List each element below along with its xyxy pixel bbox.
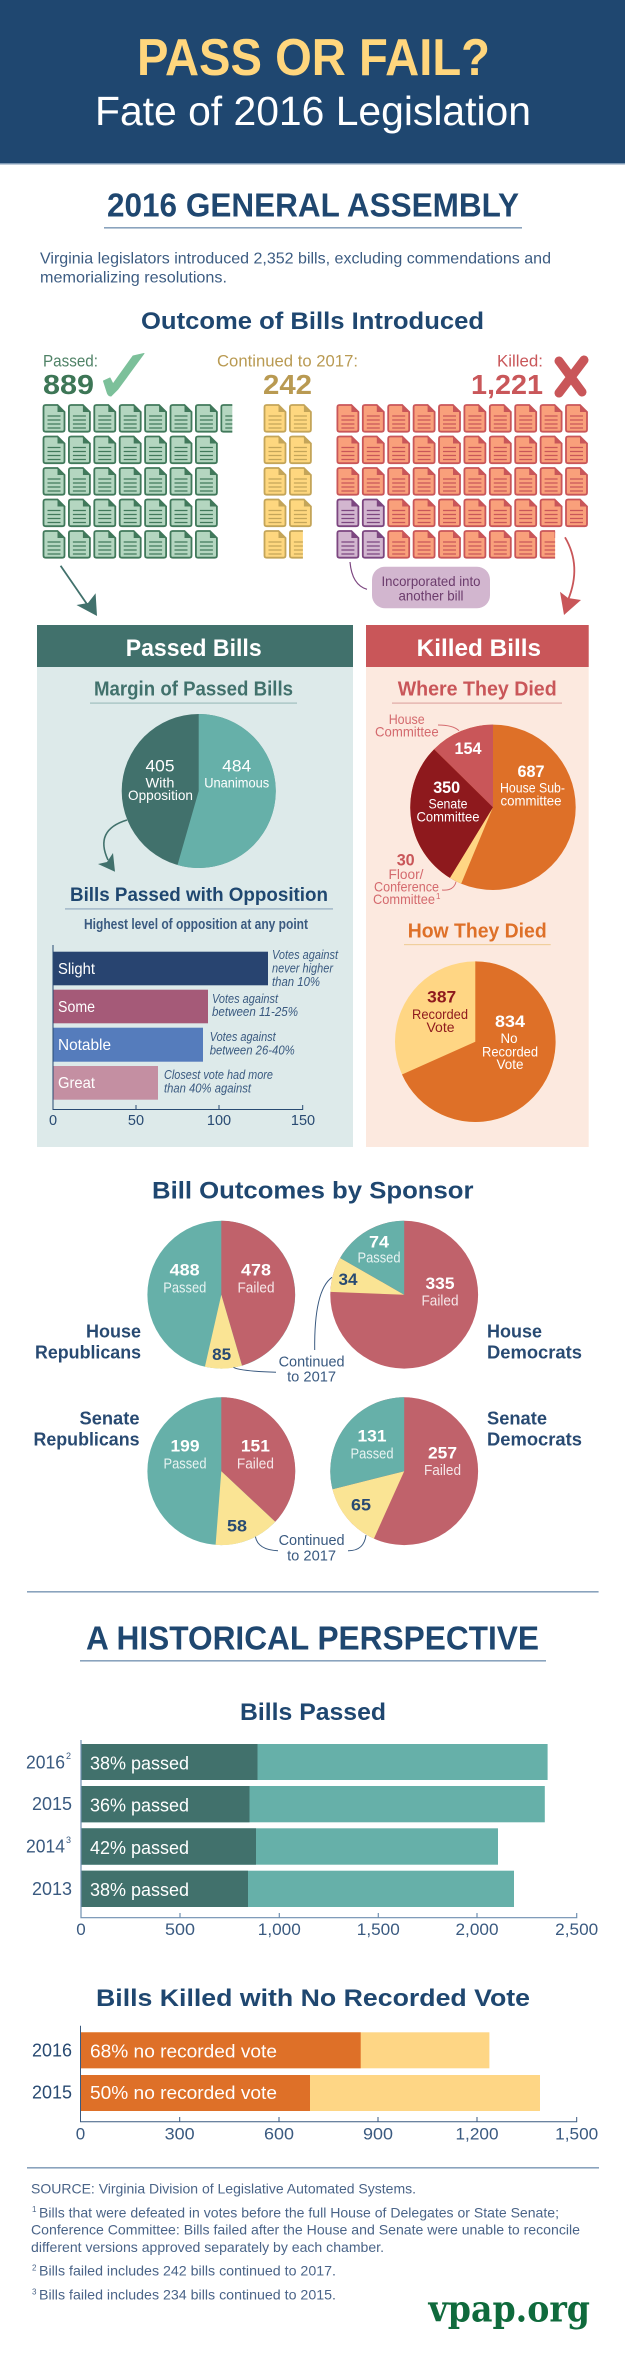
pie chart: margin of passed bills	[122, 714, 276, 868]
bar: slight: than 10%	[272, 974, 320, 989]
source and footnotes: Bills failed includes 242 bills continued to 2017.	[39, 2263, 336, 2279]
axis: 2,000	[456, 1920, 498, 1939]
label: house committee: Committee	[375, 724, 439, 740]
axis	[76, 2026, 598, 2143]
axis: 2,500	[555, 1920, 598, 1939]
axis: 50	[128, 1113, 144, 1129]
icon grid: continued bills	[264, 405, 311, 558]
axis: 900	[363, 2124, 393, 2143]
source and footnotes: Bills failed includes 234 bills continued to 2015.	[39, 2287, 336, 2303]
pie chart: house republicans: 488	[170, 1261, 200, 1280]
continued count: Continued to 2017:	[217, 352, 358, 371]
source and footnotes: 2	[32, 2264, 37, 2272]
arrow: to bills passed with opposition	[98, 820, 127, 872]
heading: where they died: Where They Died	[398, 679, 557, 701]
subheading: Highest level of opposition at any point	[84, 917, 308, 933]
pie chart: margin of passed bills: With	[146, 775, 174, 791]
pie chart: senate republicans: 151	[241, 1437, 270, 1456]
bar: some: Some	[58, 999, 95, 1016]
bar: notable: between 26-40%	[210, 1042, 295, 1058]
subtitle: Fate of 2016 Legislation	[95, 88, 531, 134]
bar: great: Great	[58, 1075, 96, 1092]
pie chart: senate democrats	[330, 1397, 478, 1545]
source and footnotes: Bills that were defeated in votes before the full House of Delegates or State Senate;	[39, 2204, 559, 2220]
pie chart: house democrats: 74	[369, 1232, 390, 1251]
bar: 2013: 38% passed	[90, 1880, 189, 1900]
pie chart: where they died	[410, 725, 576, 890]
heading: bills killed with no recorded vote: Bills Killed with No Recorded Vote	[96, 1985, 530, 2012]
label: house democrats: Democrats	[487, 1342, 582, 1362]
bar: 2015: 36% passed	[90, 1796, 189, 1816]
axis: 1,000	[258, 1920, 301, 1939]
label: floor conference committee: Committee	[373, 891, 435, 907]
bar: 2013: 2013	[32, 1879, 72, 1899]
pie chart: senate democrats: 257	[428, 1443, 457, 1462]
bar chart: opposition level	[49, 945, 339, 1129]
axis: 150	[291, 1113, 315, 1129]
axis: 0	[76, 1920, 86, 1939]
pie chart: margin of passed bills: 405	[146, 757, 174, 776]
heading: 2016 general assembly: 2016 GENERAL ASSEMBLY	[107, 187, 519, 224]
bar: slight: never higher	[272, 960, 334, 976]
axis	[76, 1740, 598, 1939]
label: house democrats: House	[487, 1321, 542, 1341]
bar: notable: Notable	[58, 1037, 111, 1054]
pie chart: where they died: Senate	[428, 796, 468, 812]
panel heading: killed bills: Killed Bills	[417, 635, 541, 662]
pie chart: senate republicans	[147, 1397, 295, 1545]
killed count: 1,221	[471, 369, 543, 400]
source and footnotes: SOURCE: Virginia Division of Legislative Automated Systems.	[31, 2180, 416, 2196]
label: floor conference committee	[373, 851, 456, 907]
pie chart: where they died: House Sub-	[500, 780, 565, 796]
pie chart: how they died: 834	[495, 1012, 526, 1031]
label: house republicans: Republicans	[35, 1342, 141, 1362]
continued count	[217, 352, 358, 400]
label: senate republicans: Senate	[80, 1408, 140, 1428]
pie chart: margin of passed bills: Opposition	[128, 787, 193, 803]
arrow: to passed bills	[61, 566, 97, 616]
bar: 2014: 42% passed	[90, 1838, 189, 1858]
label: house committee: House	[389, 711, 425, 727]
axis: 300	[165, 2124, 195, 2143]
pie chart: where they died: Committee	[416, 809, 480, 825]
label: floor conference committee: Conference	[374, 879, 439, 895]
pie chart: senate republicans: Passed	[164, 1455, 206, 1472]
callout: continued to 2017, senate: Continued	[279, 1532, 345, 1549]
label: house committee	[375, 711, 459, 740]
label: floor conference committee: 1	[436, 892, 441, 901]
pie chart: house democrats: 34	[338, 1270, 358, 1289]
pie chart: where they died: 687	[518, 762, 544, 781]
bar: notable	[53, 1028, 295, 1062]
pie chart: how they died: Vote	[496, 1056, 524, 1072]
axis: 1,500	[357, 1920, 400, 1939]
pie chart: where they died: committee	[500, 793, 562, 809]
bar: 2014: 2014	[26, 1836, 65, 1856]
pie chart: house republicans: 85	[212, 1345, 231, 1364]
axis: 1,200	[456, 2124, 498, 2143]
pie chart: house democrats: Failed	[422, 1293, 458, 1310]
pie chart: house republicans: 478	[241, 1261, 271, 1280]
logo: vpap.org: vpap.org	[428, 2289, 590, 2331]
passed count	[43, 352, 144, 400]
pie chart: how they died: Recorded	[412, 1006, 468, 1022]
bar: 2015: 50% no recorded vote	[90, 2083, 277, 2103]
bar: slight: Votes against	[272, 947, 339, 962]
icon grid: killed bills	[337, 405, 587, 558]
bar: 2016: 38% passed	[90, 1753, 189, 1773]
pie chart: house democrats: Passed	[358, 1249, 400, 1266]
heading: outcome of bills introduced: Outcome of Bills Introduced	[141, 308, 484, 335]
arrow: to killed bills	[560, 537, 581, 615]
callout: continued to 2017, senate	[255, 1532, 366, 1565]
icon grid: passed bills	[44, 405, 242, 558]
pie chart: how they died: Vote	[426, 1019, 455, 1035]
bar chart: bills killed with no recorded vote	[32, 2026, 598, 2143]
pie chart: where they died: 350	[433, 778, 460, 797]
heading: margin of passed bills: Margin of Passed Bills	[94, 679, 293, 701]
pie chart: senate democrats: Failed	[424, 1462, 461, 1479]
pie chart: senate republicans: Failed	[237, 1455, 274, 1472]
heading: how they died: How They Died	[408, 920, 547, 942]
intro text	[40, 250, 551, 287]
axis: 1,500	[555, 2124, 598, 2143]
bar: great	[53, 1066, 273, 1100]
pie chart: how they died: Recorded	[482, 1044, 538, 1060]
bar: some	[53, 990, 298, 1023]
label: floor conference committee: 30	[397, 851, 415, 870]
callout: incorporated into another bill	[350, 562, 490, 608]
passed count: Passed:	[43, 352, 98, 371]
bar: 2016	[26, 1744, 548, 1780]
bar: 2016: 2	[66, 1751, 71, 1761]
icon: x mark	[559, 360, 584, 393]
bar: 2016: 2016	[26, 1752, 65, 1772]
callout: continued to 2017, house: to 2017	[287, 1369, 336, 1386]
axis: 0	[49, 1113, 57, 1129]
bar: great: Closest vote had more	[164, 1067, 273, 1082]
callout: continued to 2017, house	[234, 1277, 345, 1386]
bar: some: Votes against	[212, 991, 279, 1006]
pie chart: margin of passed bills: 484	[222, 757, 251, 776]
bar: 2014	[26, 1828, 498, 1865]
heading: bills passed: Bills Passed	[240, 1699, 386, 1726]
bar: notable: Votes against	[210, 1029, 277, 1044]
pie chart: senate republicans: 199	[170, 1437, 200, 1456]
label: floor conference committee: Floor/	[388, 866, 424, 882]
bar: 2016: 2016	[32, 2041, 72, 2061]
heading: a historical perspective: A HISTORICAL PERSPECTIVE	[86, 1619, 539, 1656]
bar: slight: Slight	[58, 961, 96, 978]
bar: some: between 11-25%	[212, 1004, 298, 1019]
source and footnotes	[31, 2180, 580, 2303]
pie chart: senate democrats: Passed	[350, 1445, 394, 1462]
bar chart: bills passed	[26, 1740, 598, 1939]
axis	[49, 945, 315, 1129]
callout: incorporated into another bill: another bill	[398, 588, 464, 604]
killed count	[471, 352, 584, 400]
pie chart: where they died: 154	[454, 739, 482, 758]
pie chart: house republicans	[147, 1221, 295, 1369]
callout: continued to 2017, house: Continued	[279, 1354, 345, 1371]
pie chart: margin of passed bills: Unanimous	[204, 775, 269, 791]
continued count: 242	[263, 369, 312, 400]
killed count: Killed:	[497, 352, 543, 371]
pie chart: house democrats	[330, 1221, 478, 1369]
pie chart: senate democrats: 65	[351, 1496, 371, 1515]
bar: 2015: 2015	[32, 1794, 72, 1814]
title banner	[0, 0, 625, 164]
bar: 2013	[32, 1871, 514, 1907]
heading: bill outcomes by sponsor: Bill Outcomes by Sponsor	[152, 1177, 474, 1204]
pie chart: how they died	[395, 961, 556, 1122]
bar: great: than 40% against	[164, 1081, 252, 1096]
bar: 2015	[32, 2075, 540, 2111]
pie chart: how they died: No	[500, 1030, 518, 1046]
axis: 500	[165, 1920, 195, 1939]
panel heading: passed bills: Passed Bills	[126, 635, 262, 662]
source and footnotes: 1	[32, 2205, 37, 2214]
bar: 2014: 3	[66, 1835, 71, 1845]
axis: 0	[76, 2124, 85, 2143]
panel: killed bills	[366, 625, 589, 1147]
label: house republicans	[35, 1321, 141, 1362]
source and footnotes: different versions approved separately by each chamber.	[31, 2239, 384, 2255]
pie chart: house republicans: Failed	[238, 1279, 274, 1296]
label: house democrats	[487, 1321, 582, 1362]
bar: 2015: 2015	[32, 2082, 72, 2102]
label: senate democrats: Democrats	[487, 1430, 582, 1450]
source and footnotes: Conference Committee: Bills failed after the House and Senate were unable to reconcile	[31, 2222, 580, 2238]
axis: 600	[264, 2124, 294, 2143]
label: senate republicans	[34, 1408, 140, 1450]
pie chart: house republicans: Passed	[163, 1279, 206, 1296]
intro text: Virginia legislators introduced 2,352 bills, excluding commendations and	[40, 250, 551, 267]
pie chart: how they died: 387	[427, 988, 456, 1007]
heading: bills passed with opposition: Bills Passed with Opposition	[70, 885, 328, 906]
panel: passed bills	[37, 625, 353, 1147]
bar: 2016: 68% no recorded vote	[90, 2042, 277, 2062]
intro text: memorializing resolutions.	[40, 270, 227, 287]
pie chart: senate democrats: 131	[358, 1427, 386, 1446]
passed count: 889	[43, 369, 94, 400]
title: pass or fail: PASS OR FAIL?	[137, 29, 490, 87]
bar: 2015	[32, 1786, 545, 1822]
label: senate democrats	[487, 1408, 582, 1450]
pie chart: house democrats: 335	[426, 1274, 454, 1293]
callout: incorporated into another bill: Incorporated into	[382, 573, 481, 589]
axis: 100	[207, 1113, 231, 1129]
callout: continued to 2017, senate: to 2017	[287, 1548, 336, 1565]
label: senate democrats: Senate	[487, 1408, 547, 1428]
bar: slight	[53, 947, 339, 989]
source and footnotes: 3	[32, 2288, 37, 2296]
bar: 2016	[32, 2032, 489, 2068]
icon: check mark	[104, 354, 144, 396]
label: house republicans: House	[86, 1321, 141, 1341]
pie chart: senate republicans: 58	[227, 1517, 247, 1536]
label: senate republicans: Republicans	[34, 1430, 140, 1450]
